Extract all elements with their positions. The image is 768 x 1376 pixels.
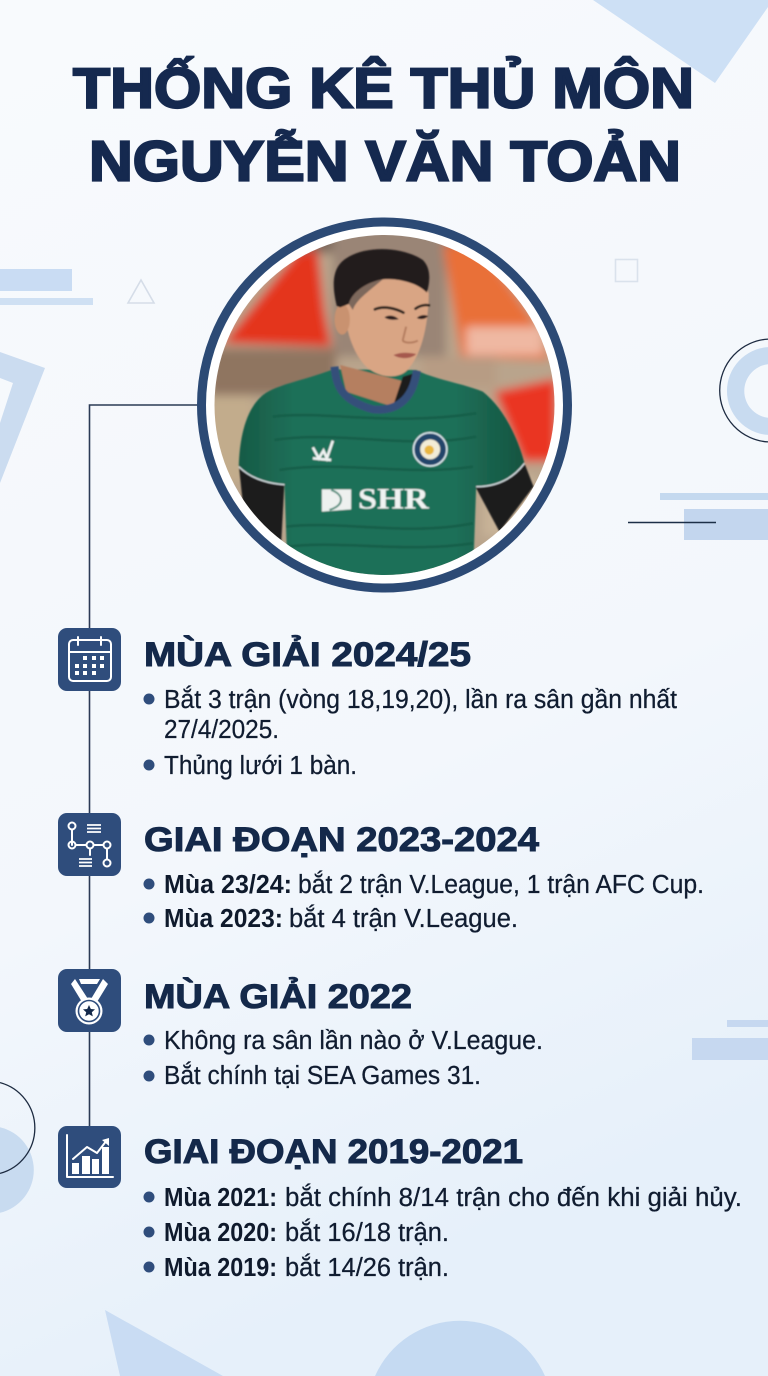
heading: GIAI ĐOẠN 2023-2024	[144, 821, 539, 859]
bullet list	[144, 685, 677, 780]
bullet list: Mùa 2019:	[164, 1254, 277, 1282]
bullet list: Mùa 23/24:	[164, 871, 292, 899]
bullet list: bắt 16/18 trận.	[285, 1218, 449, 1247]
bullet list: 27/4/2025.	[164, 716, 279, 744]
heading: MÙA GIẢI 2024/25	[144, 634, 471, 674]
bullet list	[144, 870, 704, 933]
icon: medal	[58, 969, 121, 1032]
title	[73, 56, 694, 192]
bullet list: Không ra sân lần nào ở V.League.	[164, 1027, 543, 1055]
bullet list: Mùa 2020:	[164, 1219, 277, 1247]
bullet list: bắt 2 trận V.League, 1 trận AFC Cup.	[298, 870, 704, 899]
bullet list	[144, 1183, 742, 1282]
bullet list: Mùa 2023:	[164, 905, 283, 933]
section: 2022	[58, 969, 543, 1090]
icon: calendar	[58, 628, 121, 691]
heading: GIAI ĐOẠN 2019-2021	[144, 1133, 523, 1171]
bullet list: Bắt 3 trận (vòng 18,19,20), lần ra sân gần nhất	[164, 685, 677, 714]
bullet list: bắt 4 trận V.League.	[289, 904, 518, 933]
icon: flow diagram	[58, 813, 121, 876]
bullet list: Mùa 2021:	[164, 1184, 277, 1212]
title: THỐNG KÊ THỦ MÔN	[73, 56, 694, 120]
title: NGUYỄN VĂN TOẢN	[89, 128, 681, 192]
timeline connector	[90, 405, 197, 1130]
bullet list: bắt chính 8/14 trận cho đến khi giải hủy.	[285, 1183, 742, 1212]
bullet list: Thủng lưới 1 bàn.	[164, 752, 357, 780]
section: 2023-2024	[58, 813, 704, 933]
section: 2024/25	[58, 628, 677, 780]
shirt logos	[313, 433, 447, 515]
icon: growth chart	[58, 1126, 121, 1188]
bullet list	[144, 1027, 543, 1090]
shirt logos: SHR	[358, 483, 430, 515]
bullet list: bắt 14/26 trận.	[285, 1253, 449, 1282]
heading: MÙA GIẢI 2022	[144, 976, 412, 1016]
bullet list: Bắt chính tại SEA Games 31.	[164, 1061, 481, 1090]
section: 2019-2021	[58, 1126, 742, 1282]
player photo	[202, 222, 569, 590]
